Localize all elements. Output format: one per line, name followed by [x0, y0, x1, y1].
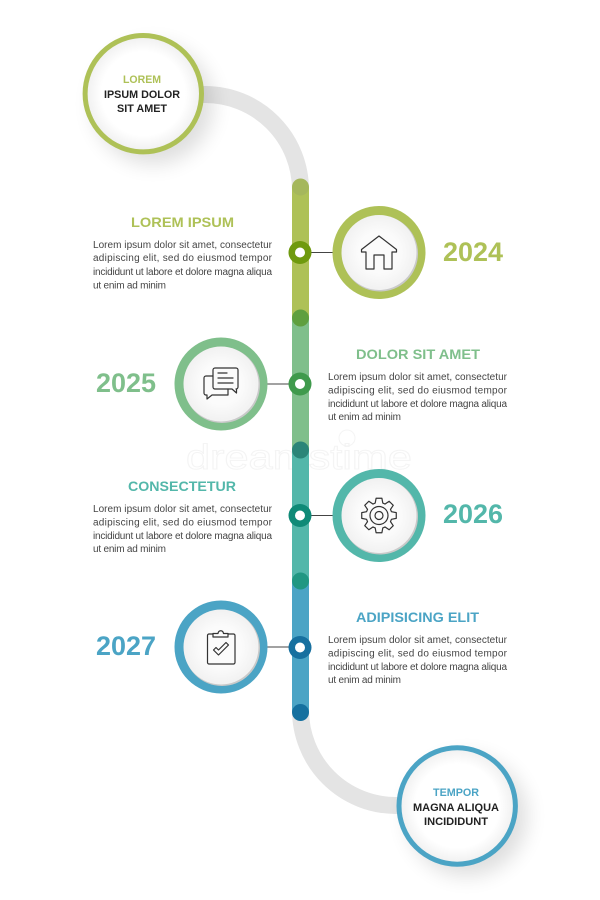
- text block: dolor sit amet: Lorem ipsum dolor sit amet, consectetur: [328, 372, 508, 383]
- watermark: dreamstime: [186, 438, 412, 477]
- timeline node: [288, 241, 334, 264]
- end circle: MAGNA ALIQUA: [413, 802, 499, 814]
- start circle: SIT AMET: [117, 103, 167, 115]
- text block: lorem ipsum: Lorem ipsum dolor sit amet, consectetur: [93, 240, 273, 251]
- start circle: [85, 35, 213, 164]
- badge: [174, 600, 268, 694]
- text block: adipisicing elit: incididunt ut labore et dolore magna aliqua: [328, 662, 507, 673]
- icon: chat bubbles: [204, 368, 238, 399]
- text block: dolor sit amet: [328, 346, 508, 423]
- text block: lorem ipsum: adipiscing elit, sed do eiusmod tempor: [93, 253, 273, 264]
- text block: dolor sit amet: adipiscing elit, sed do eiusmod tempor: [328, 386, 508, 396]
- step 2025: [96, 338, 508, 430]
- step 2024: [93, 206, 503, 299]
- text block: adipisicing elit: ADIPISICING ELIT: [356, 609, 479, 625]
- icon: gear: [362, 498, 396, 533]
- badge: [174, 338, 268, 430]
- text block: adipisicing elit: adipiscing elit, sed do eiusmod tempor: [328, 648, 508, 660]
- vertical timeline bar: [292, 178, 309, 721]
- text block: adipisicing elit: ut enim ad minim: [328, 675, 401, 686]
- end circle: INCIDIDUNT: [424, 816, 488, 828]
- step 2026: [93, 469, 503, 562]
- text block: dolor sit amet: ut enim ad minim: [328, 412, 401, 423]
- year: 2025: [96, 368, 156, 398]
- text block: consectetur: Lorem ipsum dolor sit amet, consectetur: [93, 504, 273, 515]
- text block: lorem ipsum: ut enim ad minim: [93, 280, 166, 292]
- curved connector: top: [190, 94, 300, 190]
- timeline node: [266, 372, 312, 396]
- start circle: LOREM: [123, 74, 161, 86]
- start circle: IPSUM DOLOR: [104, 89, 180, 101]
- text block: consectetur: [93, 478, 273, 555]
- icon: house: [362, 236, 396, 269]
- text block: consectetur: CONSECTETUR: [128, 478, 236, 494]
- text block: consectetur: ut enim ad minim: [93, 544, 166, 555]
- text block: dolor sit amet: DOLOR SIT AMET: [356, 346, 480, 362]
- curved connector: bottom: [300, 710, 410, 806]
- text block: consectetur: incididunt ut labore et dolore magna aliqua: [93, 531, 272, 542]
- badge: [332, 469, 426, 562]
- year: 2027: [96, 631, 156, 661]
- end circle: TEMPOR: [433, 787, 479, 799]
- text block: lorem ipsum: [93, 214, 273, 292]
- step 2027: [96, 600, 508, 694]
- text block: dolor sit amet: incididunt ut labore et dolore magna aliqua: [328, 399, 507, 410]
- timeline node: [288, 504, 334, 527]
- icon: clipboard: [208, 631, 235, 664]
- text block: adipisicing elit: Lorem ipsum dolor sit amet, consectetur: [328, 635, 508, 646]
- watermark: [186, 430, 412, 477]
- end circle: [399, 748, 527, 876]
- timeline node: [266, 636, 312, 659]
- text block: lorem ipsum: LOREM IPSUM: [131, 214, 234, 230]
- year: 2024: [443, 237, 503, 267]
- text block: consectetur: adipiscing elit, sed do eiusmod tempor: [93, 518, 273, 528]
- text block: adipisicing elit: [328, 609, 508, 686]
- text block: lorem ipsum: incididunt ut labore et dolore magna aliqua: [93, 267, 272, 278]
- badge: [332, 206, 426, 299]
- year: 2026: [443, 499, 503, 529]
